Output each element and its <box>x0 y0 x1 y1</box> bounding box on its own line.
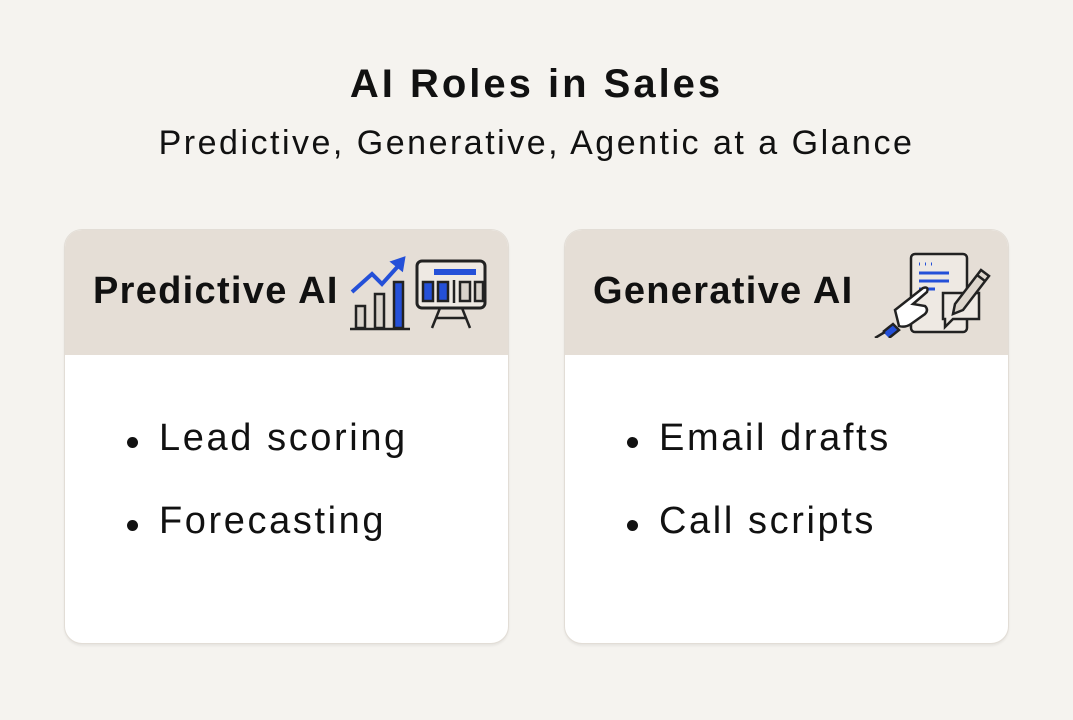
header: generative AI: Generative AI <box>593 270 854 312</box>
icon: document with pencil and hand <box>874 252 991 338</box>
panel: generative AI <box>564 229 1009 644</box>
bullet list <box>127 417 408 542</box>
panel: predictive AI: Lead scoring <box>159 417 408 459</box>
icon: chart and board <box>350 256 486 330</box>
panel: predictive AI: Forecasting <box>159 500 386 542</box>
panel: predictive AI <box>64 229 509 644</box>
header: predictive AI: Predictive AI <box>93 270 339 312</box>
title: AI Roles in Sales <box>350 62 723 106</box>
header: predictive AI <box>65 230 508 355</box>
subtitle: Predictive, Generative, Agentic at a Glance <box>159 124 914 162</box>
panel: generative AI: Email drafts <box>659 417 891 459</box>
header: generative AI <box>565 230 1008 355</box>
bullet list <box>627 417 891 542</box>
panel: generative AI: Call scripts <box>659 500 876 542</box>
